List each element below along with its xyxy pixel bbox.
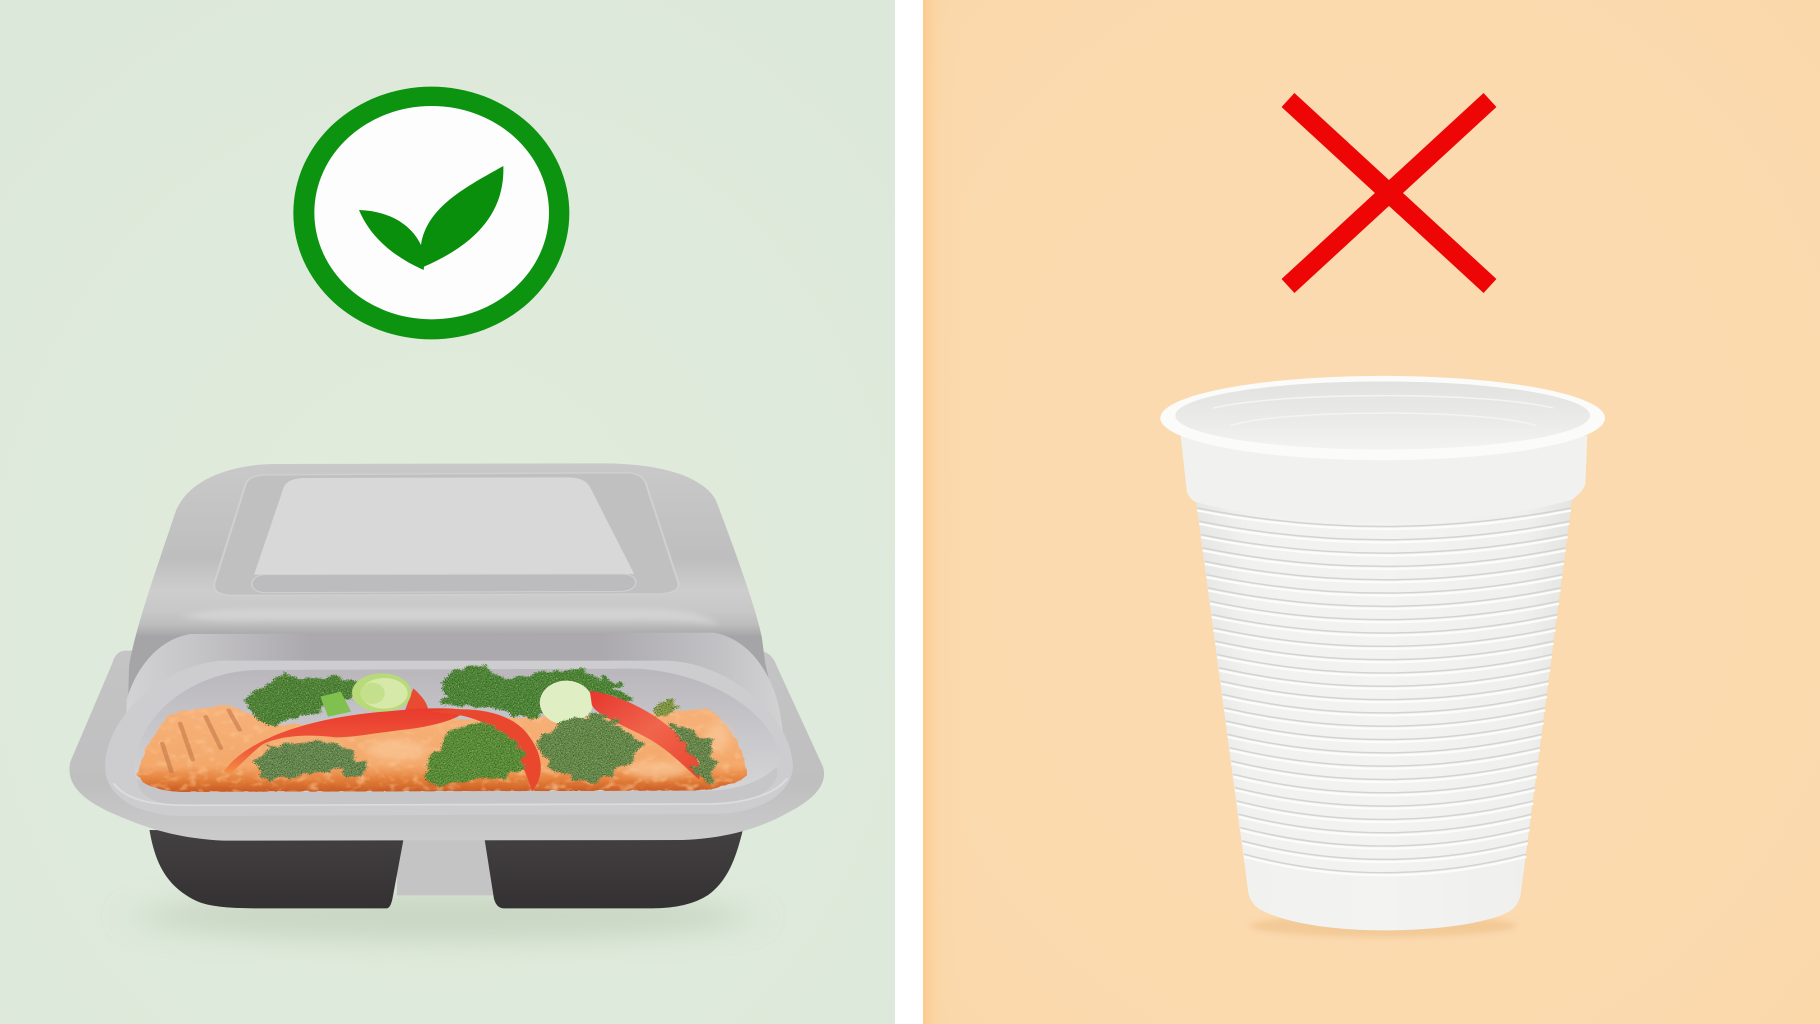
lid top recess [214,473,679,595]
panel: left green background [0,0,895,1024]
front window of lid [126,633,786,783]
cup interior rings [1213,396,1553,426]
inner bowl rim [105,661,793,816]
cup body [1196,499,1572,930]
salmon fillet [138,705,747,792]
lid top pad [254,477,634,575]
red pepper strip arched [430,709,541,792]
broccoli centre [425,720,523,788]
tray right compartment [484,830,743,908]
red pepper strip long [223,708,466,773]
broccoli upper left [246,671,365,725]
salmon grill ridges [162,710,240,772]
icon: green circle with leaf check [293,87,569,339]
food container with lid [69,463,824,942]
cup grooves [1197,508,1571,875]
broccoli top right small [649,697,682,716]
tray left compartment [149,830,405,908]
tray centre divider [397,833,494,895]
broccoli right [537,713,643,783]
disposable plastic cup [1160,376,1605,937]
cup interior [1175,381,1590,450]
inner bowl [134,669,780,795]
cucumber slice right [540,681,593,725]
lid dome [127,463,785,750]
broccoli upper middle [440,667,634,722]
container shadow [137,892,749,942]
lid shoulder highlight [183,609,718,625]
red pepper strip right [590,691,700,779]
panel: right orange background [923,0,1820,1024]
bowl front lip [138,767,777,806]
icon: red cross [1288,100,1490,286]
tray flange [69,651,824,841]
bowl lower rim line [114,778,787,805]
food [138,667,747,792]
cup upper band [1181,436,1587,523]
broccoli far right [670,723,720,783]
cucumber slice left [352,673,411,712]
cup rim [1160,376,1605,460]
cup shadow [1250,915,1517,937]
lid top tab [252,574,636,593]
pepper behind [405,688,429,713]
salmon pale flakes [366,722,730,778]
broccoli lower left [257,739,369,780]
green chunk [320,692,351,717]
